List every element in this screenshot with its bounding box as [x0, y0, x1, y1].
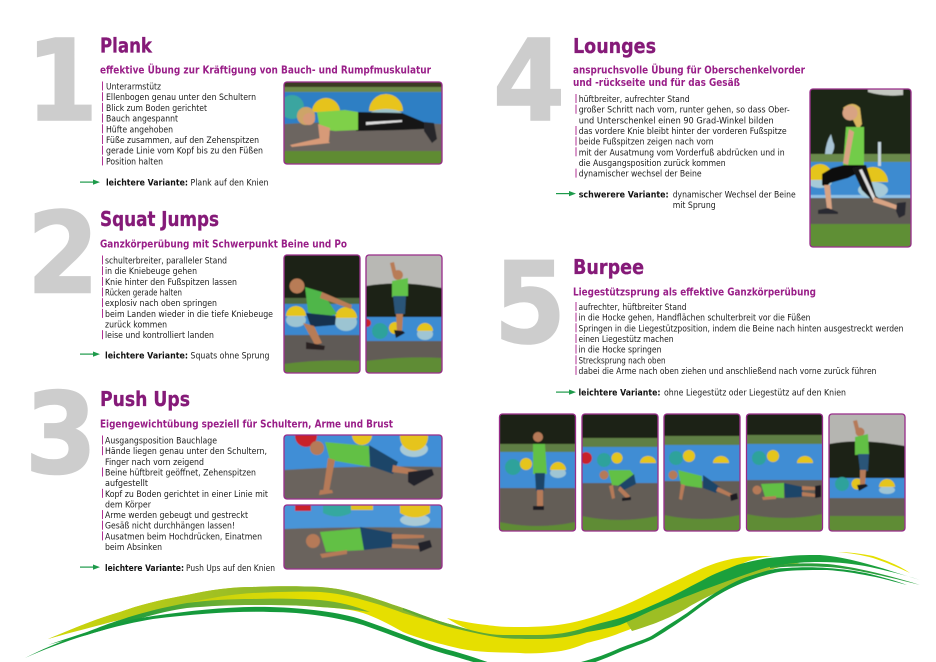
wave: lower dark green stripe left [25, 607, 493, 662]
photo: burpee crouch [580, 414, 658, 531]
easier variant: leichtere Variante: [578, 388, 660, 398]
arrow [556, 191, 576, 196]
photo: burpee standing [500, 414, 576, 531]
photo: burpee jump [829, 414, 905, 531]
photo: plank [280, 82, 442, 164]
number 4: 4 [493, 17, 565, 147]
instruction list [576, 302, 904, 377]
easier variant [578, 388, 846, 398]
easier variant [106, 178, 268, 188]
subheading: effektive Übung zur Kräftigung von Bauch- und Rumpfmuskulatur [100, 62, 432, 76]
instruction list: Bauch angespannt [106, 115, 178, 125]
arrow [80, 180, 100, 185]
heading: Squat Jumps: Squat Jumps [100, 207, 219, 231]
instruction list: dabei die Arme nach oben ziehen und anschließend nach vorne zurück führen [578, 367, 876, 377]
instruction list: schulterbreiter, paralleler Stand [105, 256, 227, 266]
instruction list: Gesäß nicht durchhängen lassen! [105, 522, 235, 532]
instruction list: Unterarmstütz [106, 82, 161, 92]
harder variant: schwerere Variante: [579, 190, 669, 200]
heading: Lounges: Lounges [573, 34, 656, 58]
wave: left green to olive strip [48, 599, 370, 645]
wave: main yellow band [48, 575, 720, 653]
wave: top right yellow sliver [837, 552, 910, 573]
instruction list: Finger nach vorn zeigend [105, 458, 204, 468]
instruction list: aufrechter, hüftbreiter Stand [578, 303, 686, 313]
instruction list: in die Hocke springen [578, 346, 662, 356]
wave: lower dark green stripe right [573, 567, 907, 662]
instruction list: mit der Ausatmung vom Vorderfuß abdrücken und in [579, 148, 785, 158]
harder variant [579, 190, 796, 211]
instruction list: Ausgangsposition Bauchlage [105, 436, 217, 446]
easier variant: leichtere Variante: [105, 564, 184, 574]
instruction list: Rücken gerade halten [105, 288, 182, 298]
instruction list: gerade Linie vom Kopf bis zu den Füßen [106, 147, 263, 157]
instruction list: die Ausgangsposition zurück kommen [579, 159, 726, 169]
harder variant: dynamischer Wechsel der Beine [673, 190, 796, 200]
number 1: 1 [26, 17, 98, 147]
instruction list: in die Hocke gehen, Handflächen schulterbreit vor die Füßen [578, 314, 810, 324]
instruction list: Füße zusammen, auf den Zehenspitzen [106, 136, 259, 146]
section 3: Push Ups [31, 388, 443, 573]
decorative wave [25, 552, 920, 662]
instruction list: großer Schritt nach vorn, runter gehen, so dass Ober- [579, 106, 790, 116]
photo: burpee plank [664, 414, 740, 531]
instruction list: Ellenbogen genau unter den Schultern [106, 93, 256, 103]
instruction list: einen Liegestütz machen [578, 335, 674, 345]
instruction list: Position halten [106, 157, 163, 167]
photo: push up low [284, 505, 442, 569]
wave: upper yellow sliver [447, 556, 773, 640]
instruction list: das vordere Knie bleibt hinter der vorderen Fußspitze [579, 127, 787, 137]
heading: Push Ups: Push Ups [100, 387, 190, 411]
section 1: Plank [37, 36, 443, 186]
subheading: Liegestützsprung als effektive Ganzkörperübung [573, 286, 816, 298]
instruction list: Hände liegen genau unter den Schultern, [105, 447, 267, 457]
wave: olive top strip [48, 586, 453, 639]
number 2: 2 [27, 190, 99, 320]
instruction list [102, 436, 268, 553]
photo: lunge [808, 89, 911, 247]
wave: olive right strip [625, 562, 800, 631]
instruction list: und Unterschenkel einen 90 Grad-Winkel bilden [579, 116, 774, 126]
easier variant: Squats ohne Sprung [190, 352, 270, 362]
arrow [80, 352, 100, 357]
easier variant [105, 564, 275, 574]
instruction list: Ausatmen beim Hochdrücken, Einatmen [105, 532, 262, 542]
arrow [80, 564, 100, 570]
instruction list [576, 94, 790, 180]
subheading: Ganzkörperübung mit Schwerpunkt Beine und Po [100, 238, 347, 250]
instruction list: Kopf zu Boden gerichtet in einer Linie mit [105, 490, 268, 500]
photo: burpee low [746, 414, 822, 531]
instruction list: beim Landen wieder in die tiefe Kniebeuge [105, 310, 273, 320]
heading: Burpee: Burpee [573, 255, 644, 279]
wave: main green band [403, 555, 920, 639]
instruction list: aufgestellt [105, 479, 149, 489]
section 4: Lounges [493, 17, 911, 247]
instruction list: dem Körper [105, 500, 151, 510]
subheading line 2: und -rückseite und für das Gesäß [573, 77, 740, 89]
instruction list [102, 82, 263, 167]
easier variant: leichtere Variante: [106, 178, 188, 188]
photo: jump [363, 255, 442, 373]
instruction list: in die Kniebeuge gehen [105, 267, 197, 277]
instruction list: Blick zum Boden gerichtet [106, 104, 207, 114]
instruction list: Strecksprung nach oben [578, 356, 666, 366]
instruction list: Beine hüftbreit geöffnet, Zehenspitzen [105, 468, 256, 478]
instruction list: Arme werden gebeugt und gestreckt [105, 511, 248, 521]
instruction list: explosiv nach oben springen [105, 299, 217, 309]
number 5: 5 [494, 240, 566, 370]
instruction list: leise und kontrolliert landen [105, 331, 214, 341]
instruction list: hüftbreiter, aufrechter Stand [579, 95, 690, 105]
easier variant: Push Ups auf den Knien [186, 564, 275, 574]
wave: thin right green line [770, 563, 920, 585]
easier variant [105, 352, 270, 362]
instruction list: beim Absinken [105, 543, 162, 553]
easier variant: leichtere Variante: [105, 352, 188, 362]
photo: push up high [283, 434, 443, 500]
instruction list: Knie hinter den Fußspitzen lassen [105, 278, 237, 288]
instruction list [102, 256, 273, 341]
photo: squat [284, 255, 360, 373]
instruction list: Hüfte angehoben [106, 125, 173, 135]
instruction list: dynamischer wechsel der Beine [579, 170, 702, 180]
arrow [556, 390, 576, 395]
easier variant: ohne Liegestütz oder Liegestütz auf den Knien [664, 388, 846, 398]
number 3: 3 [25, 370, 97, 500]
harder variant: mit Sprung [673, 201, 716, 211]
instruction list: zurück kommen [105, 320, 167, 330]
section 2: Squat Jumps [34, 208, 443, 374]
instruction list: beide Fußspitzen zeigen nach vorn [579, 138, 714, 148]
heading: Plank: Plank [100, 34, 153, 58]
section 5: Burpee [494, 240, 905, 531]
easier variant: Plank auf den Knien [190, 178, 268, 188]
subheading: Eigengewichtübung speziell für Schultern, Arme und Brust [100, 418, 393, 430]
subheading: anspruchsvolle Übung für Oberschenkelvorder [573, 62, 806, 76]
